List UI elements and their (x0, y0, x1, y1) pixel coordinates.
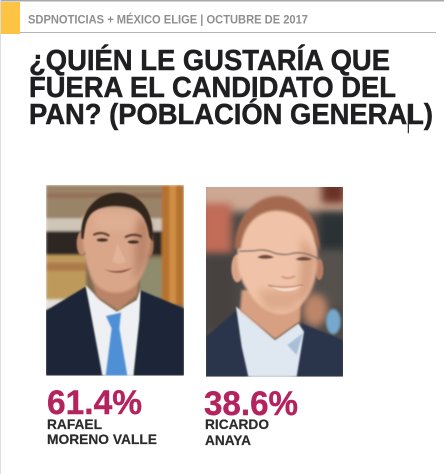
header source line: SDPNOTICIAS + MÉXICO ELIGE | OCTUBRE DE 2017 (28, 14, 308, 26)
result: Rafael Moreno Valle (47, 384, 157, 447)
shirt (86, 285, 141, 376)
eyes and brows (93, 233, 142, 273)
suit (46, 287, 184, 376)
face (82, 207, 151, 293)
name: MORENO VALLE (47, 431, 157, 447)
title (29, 43, 433, 133)
suit (206, 310, 343, 377)
hair (81, 193, 153, 242)
percentage 61.4%: 61.4% (47, 384, 142, 422)
name (205, 416, 269, 448)
name (47, 416, 157, 447)
neck (240, 290, 302, 339)
blurred background (206, 187, 343, 377)
title: ¿QUIÉN LE GUSTARÍA QUE (29, 43, 390, 77)
name: RICARDO (205, 416, 269, 432)
name: ANAYA (205, 432, 251, 448)
ears (77, 231, 87, 255)
face (237, 198, 317, 314)
title: FUERA EL CANDIDATO DEL (29, 72, 396, 104)
glasses, eyes and smile (239, 250, 319, 291)
photo: Rafael Moreno Valle (46, 185, 184, 376)
percentage 38.6%: 38.6% (204, 385, 298, 423)
bookshelf background (46, 185, 184, 376)
name: RAFAEL (47, 416, 102, 432)
mouth (103, 267, 133, 273)
result: Ricardo Anaya (204, 385, 298, 448)
neck (90, 273, 138, 311)
ears (231, 254, 243, 282)
photo: Ricardo Anaya (206, 187, 343, 377)
header accent block (1, 2, 20, 34)
hair (235, 196, 320, 252)
shirt (236, 307, 304, 377)
tie (106, 313, 127, 376)
